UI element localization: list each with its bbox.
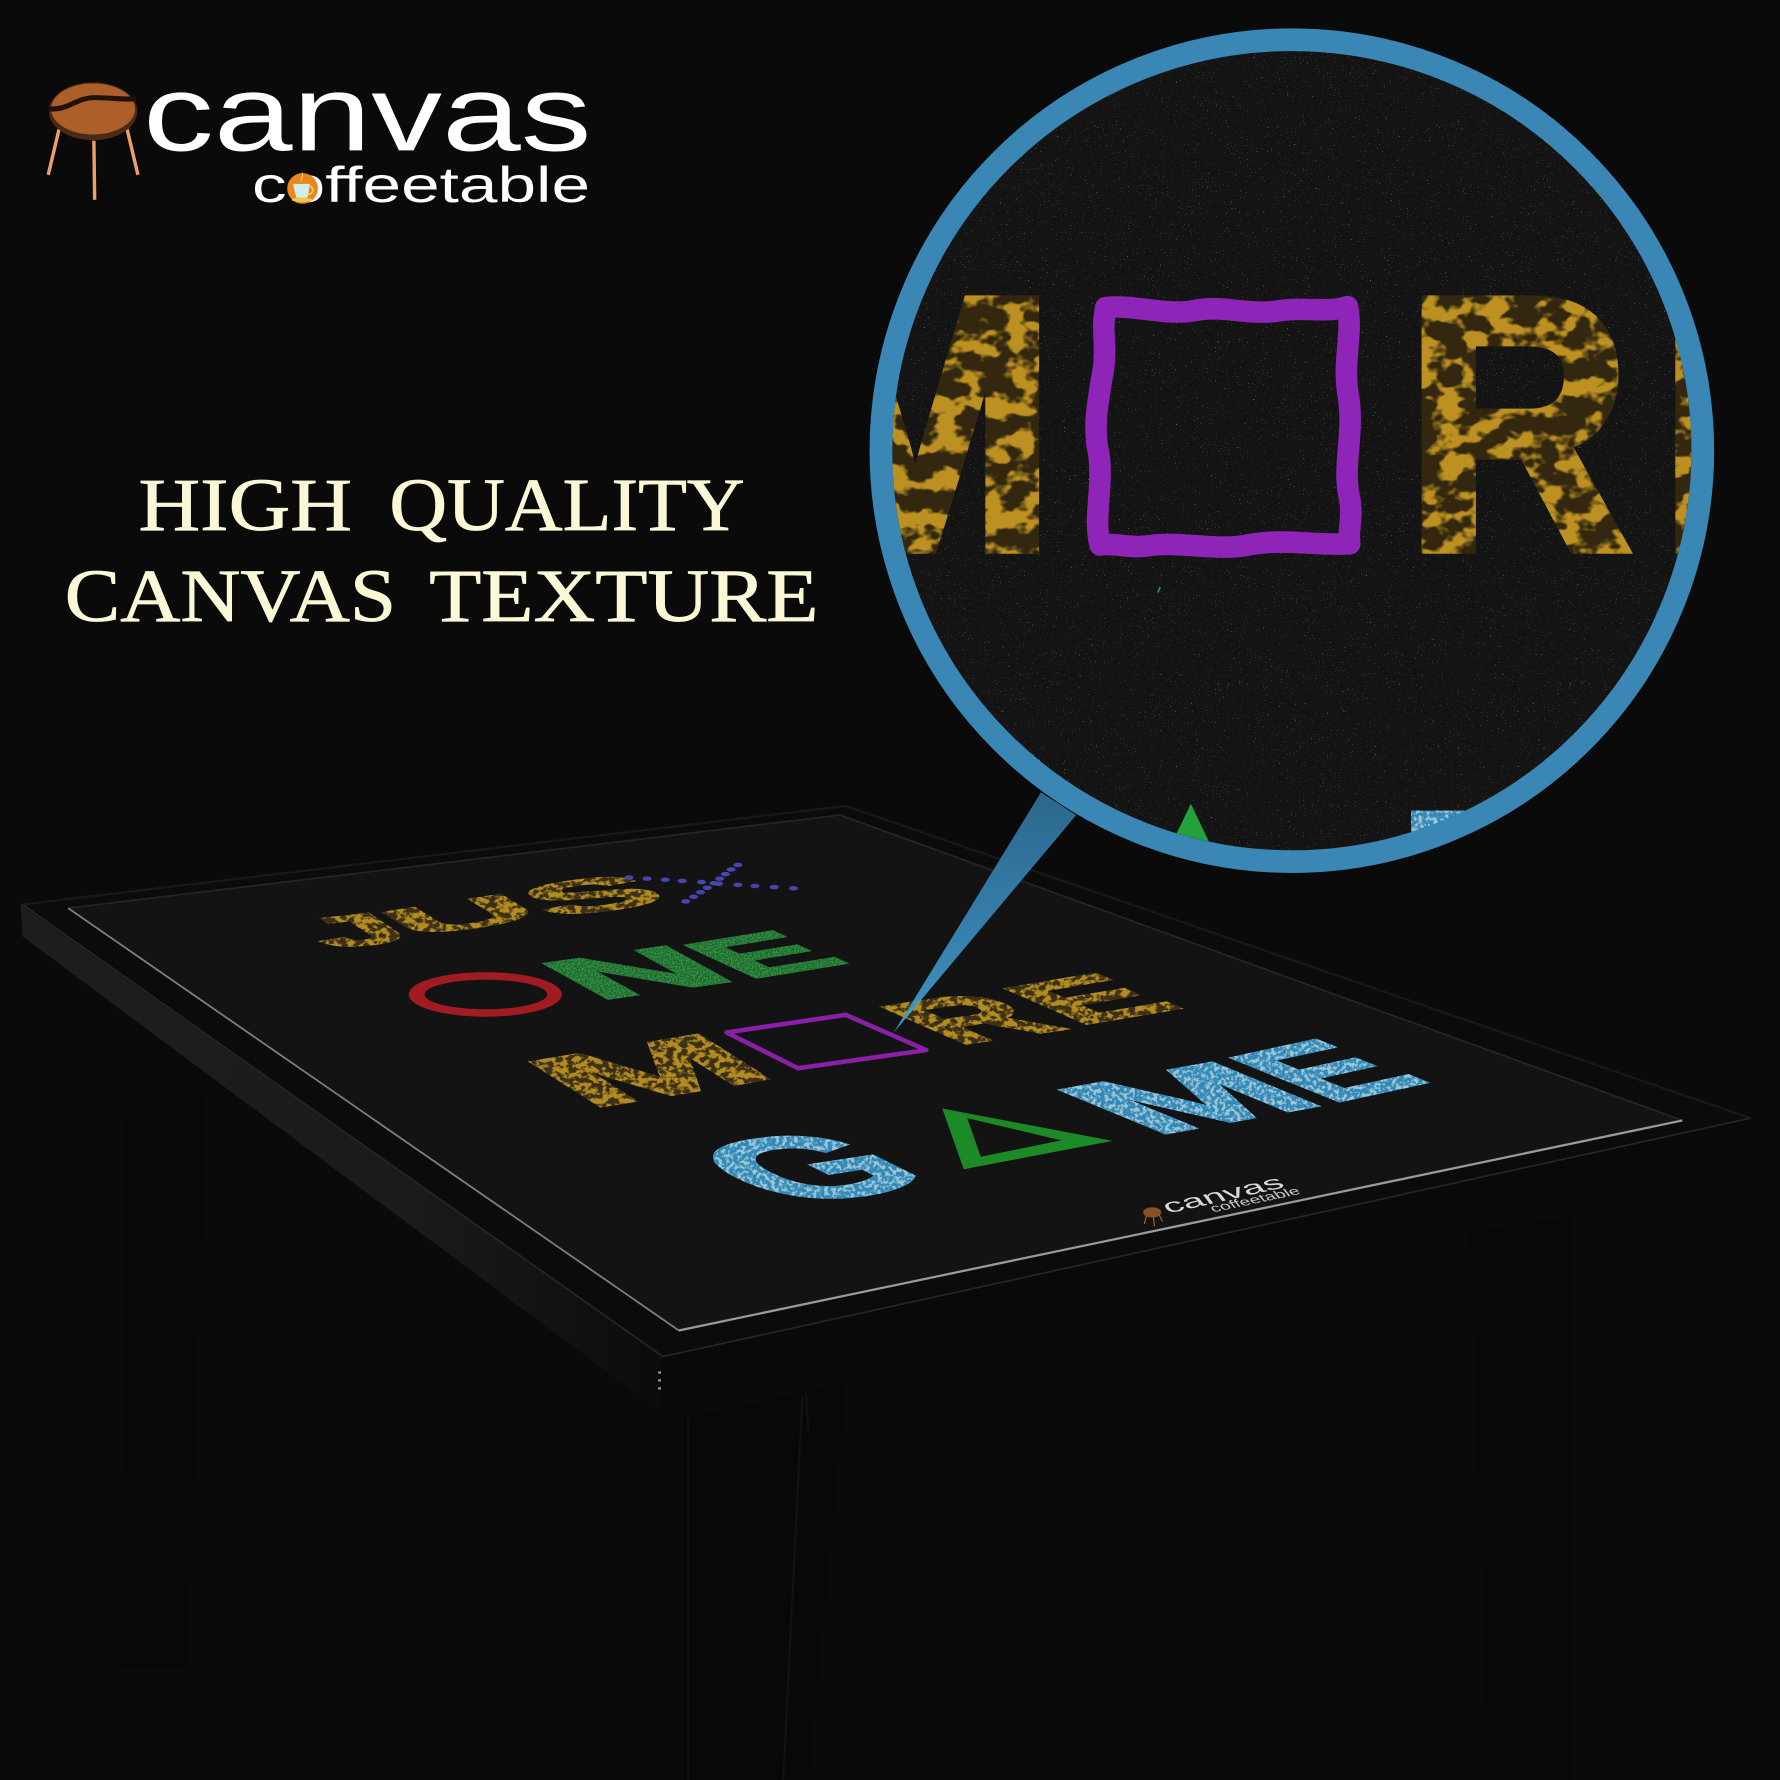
heading: HIGH: [138, 464, 352, 547]
table legs: [119, 1078, 1572, 1780]
table artwork: word GAME: [645, 1025, 1465, 1223]
wordmark canvas: canvas: [143, 53, 592, 174]
small logo on table: coffeetable: [1207, 1185, 1304, 1215]
icon: coffee bean table: [48, 82, 138, 200]
small logo on table: [1143, 1171, 1304, 1226]
heading: [65, 464, 818, 638]
purple square O: [727, 1015, 926, 1068]
letters R E: R: [847, 980, 1094, 1056]
letter M: M: [496, 1019, 803, 1122]
letters J U S: J: [278, 904, 430, 957]
letters M E: M: [1015, 1047, 1363, 1149]
green triangle A: [942, 1109, 1112, 1169]
lens ring: [881, 40, 1703, 862]
wordmark coffeetable: coffeetable: [252, 157, 590, 213]
letters M E: E: [1190, 1025, 1465, 1117]
letters R E: E: [972, 962, 1210, 1036]
heading: CANVAS: [65, 555, 396, 638]
canvas table top: [68, 815, 1682, 1330]
icon: coffee cup: [287, 173, 318, 204]
letters N E: [514, 920, 873, 1011]
heading: QUALITY: [389, 464, 745, 547]
letters M E: [1015, 1025, 1465, 1149]
canvas speckle texture: [885, 45, 1703, 863]
dotted X: [624, 863, 798, 904]
heading: TEXTURE: [429, 555, 818, 638]
magnified letters: M: [773, 224, 1057, 625]
table frame: [20, 806, 1750, 1413]
lens background: [889, 48, 1695, 854]
letters J U S: S: [500, 864, 685, 927]
letters J U S: [278, 864, 685, 957]
small logo on table: canvas: [1156, 1171, 1289, 1217]
letter G: G: [645, 1112, 976, 1223]
magnified purple square: [1096, 307, 1351, 547]
letters R E: [847, 962, 1210, 1056]
letters J U S: U: [362, 886, 560, 944]
table artwork: word JUST: [278, 863, 798, 957]
table artwork: word MORE: [496, 962, 1210, 1122]
red circle O: [409, 972, 562, 1017]
callout pointer: [893, 792, 1076, 1033]
letters N E: E: [655, 920, 873, 989]
brand logo: [48, 53, 592, 213]
table artwork: word ONE: [409, 920, 873, 1017]
magnified blue square: [1411, 810, 1466, 832]
magnified letters: R: [1405, 224, 1631, 625]
magnified green triangle: [1176, 804, 1209, 842]
letters N E: N: [514, 934, 761, 1011]
speck: [1158, 587, 1160, 593]
magnifier lens: canvas texture close-up: [870, 28, 1714, 873]
magnified letters: [892, 295, 1692, 842]
